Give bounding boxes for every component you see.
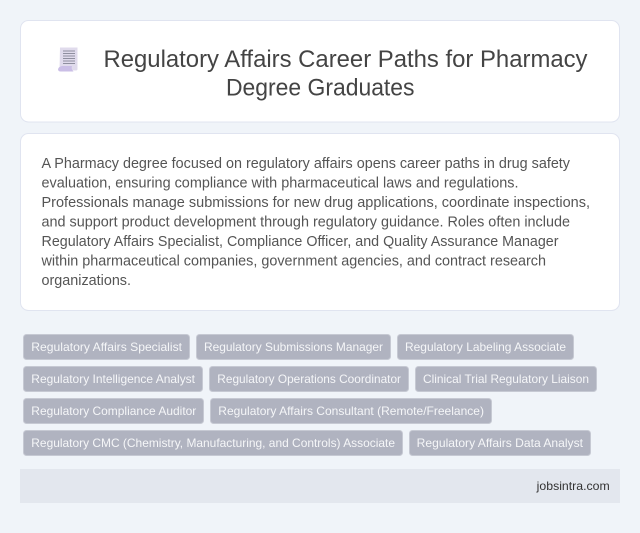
title: Degree Graduates [226,74,414,102]
footer source text: jobsintra.com [536,479,610,493]
tag: Clinical Trial Regulatory Liaison [423,372,589,386]
tag [398,334,574,360]
tag: Regulatory Submissions Manager [204,340,383,354]
tag [196,334,390,360]
tag list: career paths [24,334,596,456]
tag: Regulatory Affairs Consultant (Remote/Freelance) [218,404,484,418]
tag [24,334,190,360]
text block: description: A Pharmacy degree focused on regulatory affairs opens career paths in drug safety [42,156,571,172]
tag: Regulatory Operations Coordinator [217,372,401,386]
title [104,46,588,102]
tag [24,398,204,424]
footer [20,469,620,503]
panel: description [20,134,620,310]
panel: title card [20,20,620,122]
text block: description: Regulatory Affairs Specialist, Compliance Officer, and Quality Assurance Manager [42,234,559,250]
text block: description: organizations. [42,273,131,289]
text block: description: Professionals manage submissions for new drug applications, coordinate inspections, [42,195,590,211]
tag: Regulatory Compliance Auditor [31,404,196,418]
title: Regulatory Affairs Career Paths for Pharmacy [104,46,588,73]
tag: Regulatory CMC (Chemistry, Manufacturing, and Controls) Associate [31,436,395,450]
tag: Regulatory Affairs Specialist [31,340,183,354]
text block: description: within pharmaceutical companies, government agencies, and contract research [41,254,546,270]
tag: Regulatory Affairs Data Analyst [417,436,584,450]
text block: description: evaluation, ensuring compliance with pharmaceutical laws and regulations. [42,176,518,192]
tag [416,366,596,392]
tag [210,398,492,424]
tag [24,430,402,456]
icon: regulatory document [58,48,78,72]
tag [210,366,408,392]
tag: Regulatory Intelligence Analyst [31,372,196,386]
text block: description [41,156,590,289]
text block: description: and support product development through regulatory guidance. Roles often include [42,214,570,230]
tag [24,366,202,392]
tag [410,430,590,456]
tag: Regulatory Labeling Associate [405,340,566,354]
